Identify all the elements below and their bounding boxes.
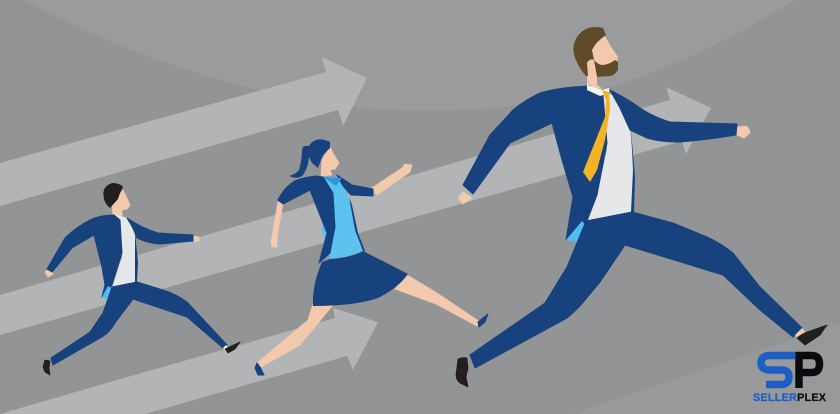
large man lining [566, 221, 587, 242]
logo S mark [761, 356, 795, 384]
small man right arm [127, 218, 199, 244]
large man forward arm [610, 90, 750, 142]
arrow: bottom [0, 308, 378, 414]
arrow: middle [0, 87, 711, 335]
woman front leg [258, 304, 333, 367]
small man trousers [51, 282, 227, 365]
large man trousers [470, 212, 802, 368]
figure: large man [456, 27, 827, 387]
small man lining [102, 286, 113, 299]
logo wordmark: SELLERPLEX [753, 392, 827, 404]
logo P mark [799, 356, 820, 388]
large man collar [587, 85, 609, 96]
woman back leg [395, 275, 480, 326]
large man tie [583, 90, 610, 182]
small man left arm and jacket [45, 215, 138, 297]
woman shoes [255, 314, 488, 375]
woman shirt [322, 176, 364, 259]
small man shoes [43, 342, 240, 375]
woman head [289, 139, 339, 178]
woman jacket [278, 176, 365, 263]
woman back arm [271, 202, 283, 247]
figure: small man [43, 183, 240, 375]
logo: Sellerplex [753, 356, 827, 404]
figure: woman [255, 139, 488, 375]
woman skirt [313, 251, 408, 306]
small man shirt [112, 214, 137, 288]
small man head [103, 183, 130, 217]
arrow: top [0, 57, 367, 206]
large man shoes [456, 325, 827, 387]
woman forward arm [372, 164, 412, 195]
large man back arm and jacket [458, 86, 635, 240]
large man shirt [586, 90, 634, 221]
large man head [573, 27, 618, 89]
woman forward sleeve [337, 175, 373, 196]
